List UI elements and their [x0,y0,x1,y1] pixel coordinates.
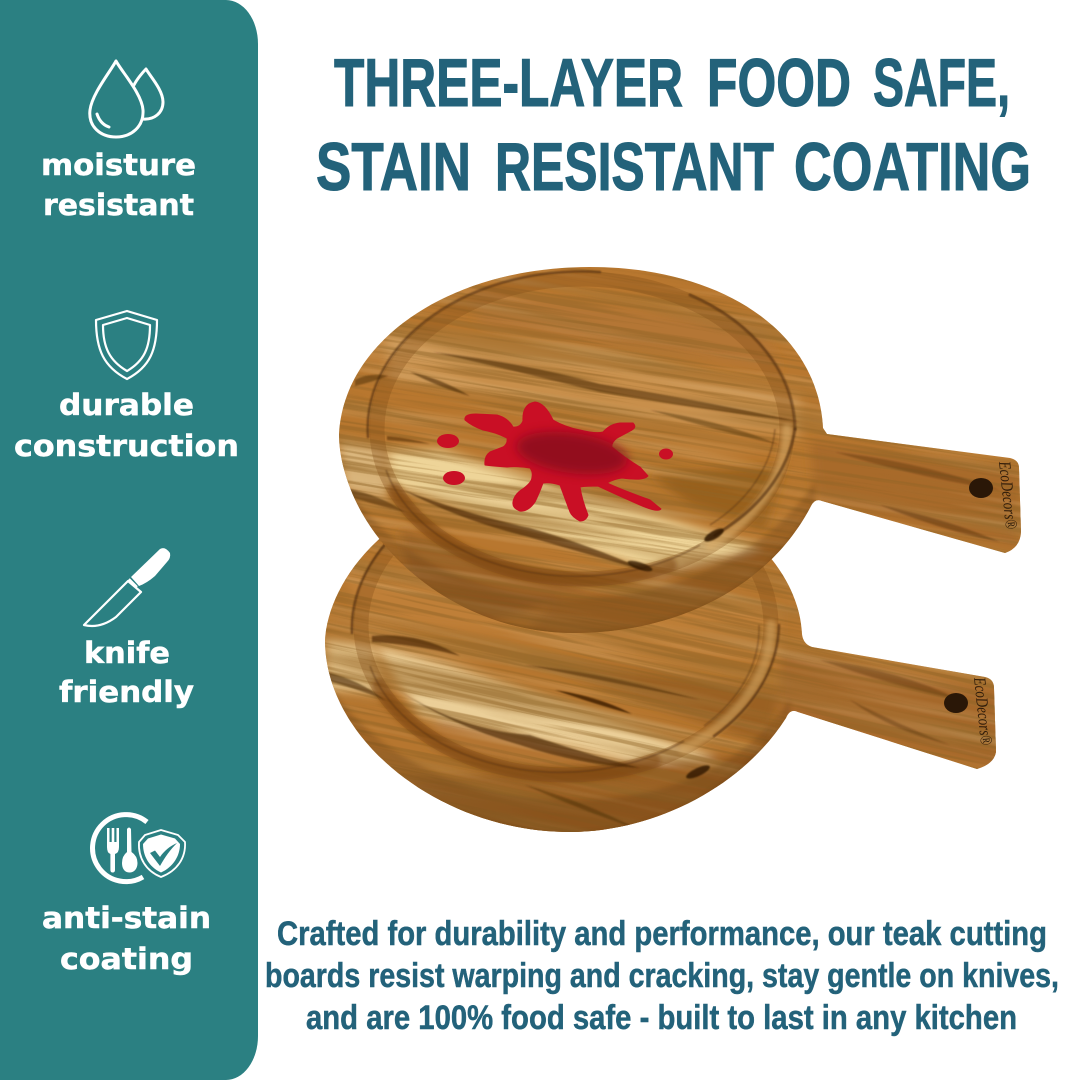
title: SAFE, [873,45,1010,121]
grain [339,276,1021,590]
grain [325,558,996,832]
wood tone areas [340,329,1021,633]
stain drops [437,434,673,485]
brand mark: EcoDecors® [970,676,996,746]
label: knife friendly [59,636,194,709]
handle hole [944,693,968,713]
handle hole [969,478,993,498]
brand mark: EcoDecors® [995,460,1021,530]
feature: anti-stain coating [42,815,211,976]
juice groove [368,271,795,579]
title [316,45,1031,205]
juice groove [350,544,781,784]
panel: sidebar background [0,0,258,1080]
label: knife friendly: knife [84,636,170,670]
label: durable construction: construction [14,429,239,463]
label: durable construction: durable [59,388,194,422]
icon: utensils with shield [93,815,185,882]
dark streaks [326,635,960,830]
title: FOOD [707,45,851,121]
label: anti-stain coating: coating [60,942,193,976]
label: anti-stain coating [42,901,211,976]
icon: knife [84,548,170,626]
red stain splat [437,402,673,521]
label: knife friendly: friendly [59,675,194,709]
label: moisture resistant: resistant [43,188,194,222]
side thickness [336,694,791,832]
feature: durable construction [14,311,239,463]
description text [265,915,1059,1037]
label: moisture resistant [41,148,196,222]
label: durable construction [14,388,239,463]
icon: shield [96,311,157,379]
icon: water drops [90,61,163,137]
feature: moisture resistant [41,61,196,222]
label: anti-stain coating: anti-stain [42,901,211,935]
product image: upper cutting board [339,267,1021,633]
wood tone areas [326,560,1000,840]
title: THREE-LAYER [334,45,683,121]
title: RESISTANT [495,129,774,205]
dark streaks [345,352,1000,572]
title: STAIN [316,129,471,205]
side thickness [354,486,816,633]
label: moisture resistant: moisture [41,148,196,182]
product image: lower cutting board [325,538,996,832]
feature: knife friendly [59,548,194,709]
